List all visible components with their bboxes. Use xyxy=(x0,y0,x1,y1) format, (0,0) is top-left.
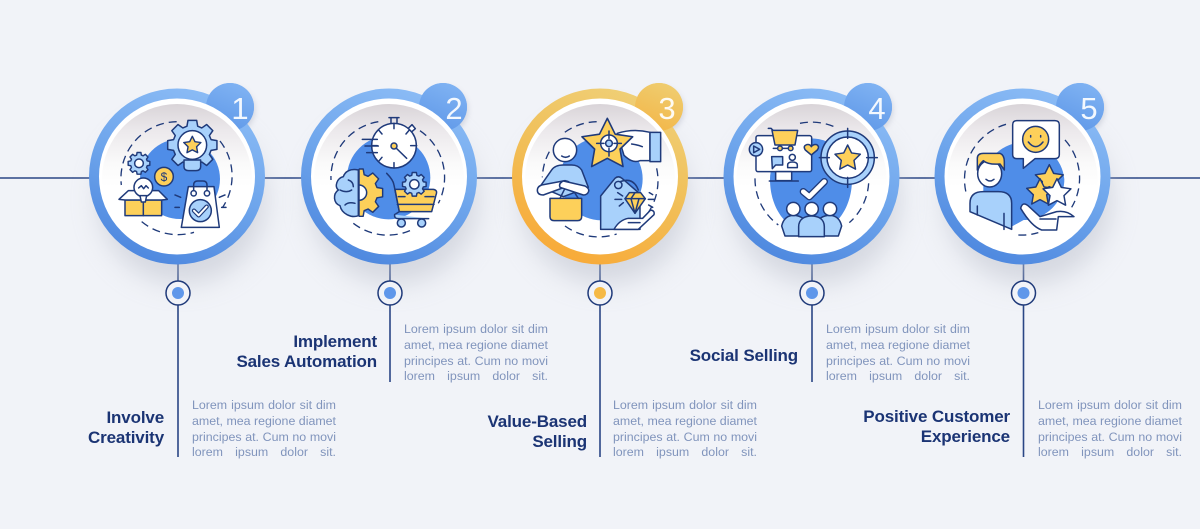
stem 3 xyxy=(599,262,601,457)
step 1 circle xyxy=(89,83,266,457)
step 4 circle xyxy=(724,83,900,382)
stem 5 xyxy=(1022,262,1024,457)
heading 2 xyxy=(236,332,377,370)
step 2 circle xyxy=(301,83,478,382)
disc xyxy=(311,98,467,254)
stem 2 xyxy=(389,262,391,382)
heading 5 xyxy=(863,407,1010,446)
heading 3: Value-Based xyxy=(488,412,587,431)
shadow xyxy=(521,116,689,284)
badge cap xyxy=(635,83,683,131)
text 5: Lorem ipsum dolor sit dim xyxy=(1038,398,1182,412)
number 3: 3 xyxy=(658,91,676,126)
heading 2: Sales Automation xyxy=(236,352,377,370)
shadow xyxy=(310,116,478,284)
heading 3: Selling xyxy=(532,432,587,450)
disc xyxy=(99,98,255,254)
badge xyxy=(1056,83,1105,133)
number 2: 2 xyxy=(445,91,463,126)
text 2 xyxy=(404,322,548,383)
step 3 circle xyxy=(512,83,689,457)
badge xyxy=(206,83,255,133)
icon: creativity: $ xyxy=(161,170,168,184)
stem 4 xyxy=(811,262,813,382)
ring xyxy=(89,88,265,264)
badge cap xyxy=(1056,83,1104,131)
text 2: principes at. Cum no movi xyxy=(404,354,548,368)
disc xyxy=(734,98,890,254)
step 5 circle xyxy=(934,83,1112,457)
text 4: principes at. Cum no movi xyxy=(826,354,970,368)
text 4: amet, mea regione diamet xyxy=(826,338,970,352)
icon: social selling xyxy=(749,122,877,237)
badge cap xyxy=(844,83,892,131)
text 5 xyxy=(1038,398,1182,459)
heading 1: Involve xyxy=(106,408,164,427)
shadow xyxy=(944,116,1112,284)
shadow xyxy=(98,116,266,284)
heading 4: Social Selling xyxy=(690,346,798,365)
text 4 xyxy=(826,322,970,383)
heading 2: Implement xyxy=(293,332,377,351)
text 3 xyxy=(613,398,757,459)
ring xyxy=(934,88,1110,264)
text 2: amet, mea regione diamet xyxy=(404,338,548,352)
text 5: amet, mea regione diamet xyxy=(1038,414,1182,428)
ring xyxy=(512,88,688,264)
text 4: lorem ipsum dolor sit. xyxy=(826,369,970,383)
text 2: Lorem ipsum dolor sit dim xyxy=(404,322,548,336)
node 5 xyxy=(1012,281,1036,305)
text 2: lorem ipsum dolor sit. xyxy=(404,369,548,383)
ring xyxy=(301,88,477,264)
ring xyxy=(724,88,900,264)
text 5: lorem ipsum dolor sit. xyxy=(1038,445,1182,459)
disc xyxy=(522,98,678,254)
heading 3 xyxy=(488,412,587,450)
node 3 xyxy=(588,281,612,305)
badge cap xyxy=(206,83,254,131)
text 1: principes at. Cum no movi xyxy=(192,430,336,444)
heading 5: Experience xyxy=(921,426,1010,446)
text 3: principes at. Cum no movi xyxy=(613,430,757,444)
text 5: principes at. Cum no movi xyxy=(1038,430,1182,444)
number 4: 4 xyxy=(868,91,886,126)
badge xyxy=(419,83,468,133)
text 1: lorem ipsum dolor sit. xyxy=(192,445,336,459)
text 1: amet, mea regione diamet xyxy=(192,414,336,428)
text 3: Lorem ipsum dolor sit dim xyxy=(613,398,757,412)
text 3: lorem ipsum dolor sit. xyxy=(613,445,757,459)
horizontal timeline xyxy=(0,177,1200,179)
disc xyxy=(944,98,1100,254)
badge xyxy=(635,83,684,133)
text 1 xyxy=(192,398,336,459)
icon: customer experience xyxy=(965,121,1080,235)
heading 5: Positive Customer xyxy=(863,407,1010,426)
badge xyxy=(844,83,893,133)
text 1: Lorem ipsum dolor sit dim xyxy=(192,398,336,412)
shadow xyxy=(732,116,900,284)
stem 1 xyxy=(177,262,179,457)
heading 1: Creativity xyxy=(88,428,164,446)
number 1: 1 xyxy=(231,91,249,126)
badge cap xyxy=(419,83,467,131)
icon: creativity xyxy=(119,120,232,235)
icon: value selling xyxy=(537,118,661,237)
node 1 xyxy=(166,281,190,305)
node 2 xyxy=(378,281,402,305)
heading 1 xyxy=(88,408,164,446)
text 3: amet, mea regione diamet xyxy=(613,414,757,428)
number 5: 5 xyxy=(1080,91,1098,126)
icon: automation xyxy=(331,118,445,235)
text 4: Lorem ipsum dolor sit dim xyxy=(826,322,970,336)
node 4 xyxy=(800,281,824,305)
